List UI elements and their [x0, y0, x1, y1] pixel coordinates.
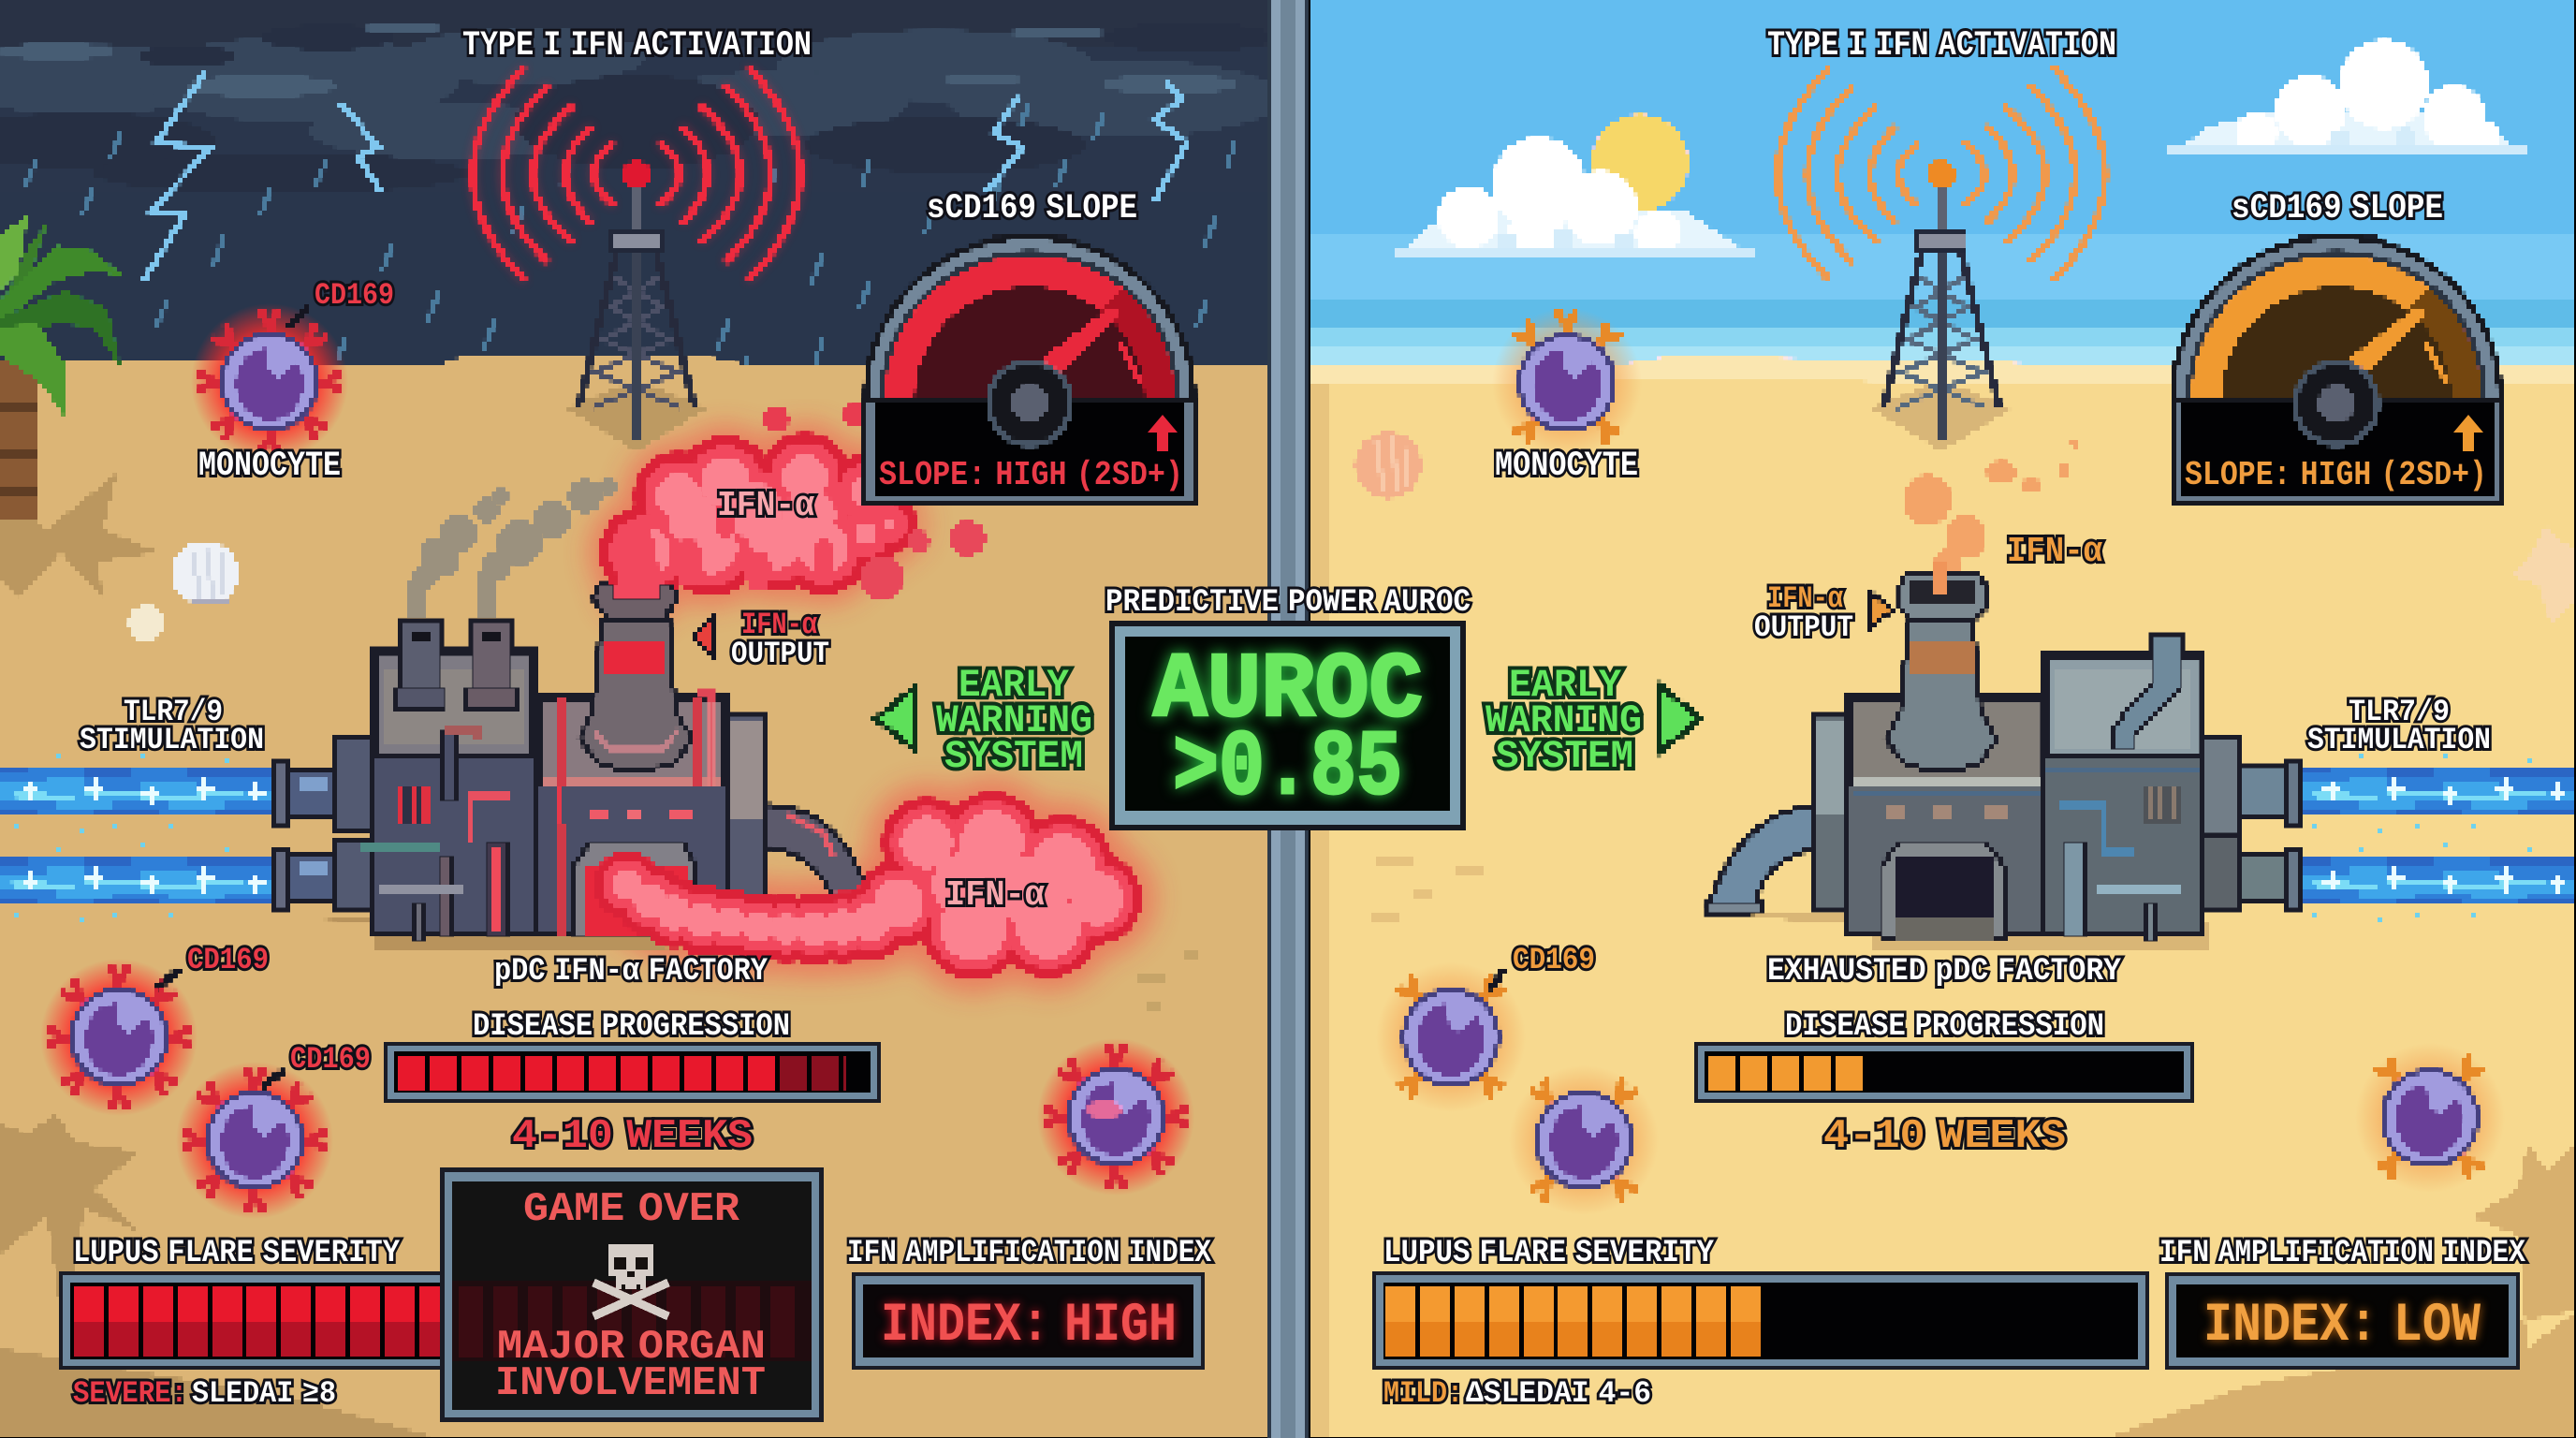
index box: left	[852, 1272, 1205, 1370]
factory label: left: pDC IFN-α FACTORY	[494, 954, 768, 990]
CD169 label: CD169	[187, 943, 269, 977]
AUROC panel	[1109, 621, 1466, 830]
AUROC panel: AUROC	[1153, 639, 1423, 743]
glows	[40, 69, 2505, 1219]
severity bar: right	[1372, 1271, 2149, 1370]
icon: skull and crossbones	[593, 1244, 668, 1316]
severity note: right	[1383, 1376, 1651, 1411]
disease progression label: left: DISEASE PROGRESSION	[473, 1009, 790, 1045]
game over panel: INVOLVEMENT	[495, 1360, 766, 1407]
sand marks	[1137, 950, 1197, 1011]
lightning bolts	[144, 73, 1187, 280]
factory label: right: EXHAUSTED pDC FACTORY	[1767, 954, 2122, 990]
early warning text: right: EARLY	[1509, 663, 1622, 708]
early warning arrows	[876, 686, 1701, 751]
monocyte label: MONOCYTE	[1495, 447, 1638, 486]
output label: left: IFN-α	[741, 608, 818, 642]
TLR label: right: STIMULATION	[2307, 723, 2491, 757]
right chimney smoke wisp	[1934, 562, 1949, 594]
monocyte	[1043, 1044, 1189, 1190]
central divider	[1267, 0, 1309, 1438]
output label: right: IFN-α	[1767, 581, 1844, 616]
CD169 leader lines	[156, 307, 1505, 1088]
game over panel: GAME OVER	[523, 1186, 740, 1233]
panel: left sand	[0, 358, 1269, 1438]
gauge label: left: sCD169 SLOPE	[927, 189, 1137, 228]
game over panel	[440, 1167, 824, 1422]
shell: pink	[1354, 432, 1422, 499]
signal tower: orange	[1778, 69, 2105, 451]
monocyte label: MONOCYTE	[198, 447, 341, 486]
gauge arrow: right	[2453, 415, 2483, 451]
palm shadow and dune, bottom left	[0, 1114, 440, 1438]
severity note: right: ΔSLEDAI 4-6	[1466, 1376, 1651, 1411]
monocyte: top right	[1512, 310, 1622, 446]
AUROC panel: >0.85	[1173, 717, 1402, 821]
palm shadow and dune, bottom right	[2106, 1142, 2576, 1438]
monocyte	[1396, 975, 1506, 1100]
index label: left: IFN AMPLIFICATION INDEX	[847, 1236, 1212, 1271]
TLR label: left: STIMULATION	[80, 723, 264, 757]
monocyte	[1529, 1078, 1639, 1203]
monocyte: top left	[197, 309, 343, 455]
panel: right sand	[1309, 358, 2576, 1438]
gauge reading: left: SLOPE: HIGH (2SD+)	[879, 456, 1183, 494]
TLR beams	[0, 754, 2576, 923]
gauge arrow: left	[1148, 415, 1178, 451]
severity note: left: SEVERE:	[73, 1376, 187, 1411]
disease progression label: right: DISEASE PROGRESSION	[1785, 1009, 2104, 1045]
CD169 label: CD169	[290, 1042, 371, 1077]
palm tree	[0, 215, 124, 518]
output arrows	[693, 590, 1892, 658]
panel: stormy sky	[0, 0, 1282, 374]
cloud	[2169, 39, 2526, 156]
small shell	[128, 605, 164, 642]
severity label: right: LUPUS FLARE SEVERITY	[1383, 1236, 1715, 1271]
severity bar: left	[59, 1271, 452, 1370]
grey smoke	[409, 477, 618, 618]
IFN-alpha cloud, lower	[612, 811, 1123, 961]
index box: left: INDEX: HIGH	[881, 1296, 1177, 1357]
title: right: TYPE I IFN ACTIVATION	[1767, 26, 2116, 66]
shell	[171, 541, 239, 605]
starfish	[2513, 524, 2576, 623]
IFN label right: IFN-α	[2007, 532, 2102, 572]
palm shadow	[0, 473, 159, 599]
index box: right: INDEX: LOW	[2203, 1296, 2481, 1357]
early warning text: right: WARNING	[1486, 698, 1642, 743]
IFN label upper cloud: IFN-α	[717, 486, 814, 526]
panel: sunny sky	[1309, 0, 2576, 373]
art layer	[0, 69, 2576, 1213]
early warning text: left: SYSTEM	[944, 734, 1083, 779]
disease progression bar: right	[1694, 1042, 2194, 1103]
early warning text: right: SYSTEM	[1496, 734, 1633, 779]
severity label: left: LUPUS FLARE SEVERITY	[73, 1236, 401, 1271]
CD169 label: CD169	[1513, 943, 1595, 977]
monocyte	[2375, 1055, 2485, 1181]
factory: pDC IFN-alpha	[274, 585, 866, 948]
monocyte	[182, 1067, 328, 1213]
IFN-alpha cloud, upper	[613, 404, 986, 599]
orange puffs	[1903, 439, 2080, 590]
IFN label lower cloud: IFN-α	[945, 875, 1045, 916]
output label: right: OUTPUT	[1754, 610, 1853, 645]
output label: left	[731, 608, 829, 671]
TLR label: left	[80, 695, 264, 757]
index box: right	[2165, 1272, 2520, 1370]
game over panel: MAJOR ORGAN	[497, 1324, 766, 1371]
gauge label: right: sCD169 SLOPE	[2232, 189, 2443, 228]
TLR label: right: TLR7/9	[2349, 695, 2450, 729]
monocyte	[46, 964, 192, 1110]
early warning text: right	[1486, 663, 1642, 779]
severity note: left	[73, 1376, 336, 1411]
severity note: left: SLEDAI ≥8	[192, 1376, 336, 1411]
output label: right	[1754, 581, 1853, 645]
gauge: red	[863, 234, 1196, 506]
early warning text: left: WARNING	[936, 698, 1092, 743]
early warning text: left: EARLY	[959, 663, 1070, 708]
predictive power label: PREDICTIVE POWER AUROC	[1105, 585, 1471, 621]
signal tower: red	[473, 69, 800, 451]
weeks label: right: 4-10 WEEKS	[1823, 1113, 2066, 1160]
output label: left: OUTPUT	[731, 637, 829, 671]
factory: exhausted pDC	[1708, 574, 2301, 948]
disease progression bar: left	[384, 1042, 881, 1103]
early warning text: left	[936, 663, 1092, 779]
severity note: right: MILD:	[1383, 1376, 1463, 1411]
sun	[1591, 114, 1689, 212]
rain	[7, 103, 1236, 389]
index label: right: IFN AMPLIFICATION INDEX	[2159, 1236, 2526, 1271]
gauge: orange	[2170, 234, 2503, 506]
TLR label: right	[2307, 695, 2491, 757]
cloud	[1395, 137, 1754, 257]
TLR label: left: TLR7/9	[124, 695, 223, 729]
gauge reading: right: SLOPE: HIGH (2SD+)	[2185, 456, 2487, 494]
CD169 label: CD169	[315, 278, 394, 313]
weeks label: left: 4-10 WEEKS	[512, 1113, 753, 1160]
title: left: TYPE I IFN ACTIVATION	[462, 26, 812, 66]
